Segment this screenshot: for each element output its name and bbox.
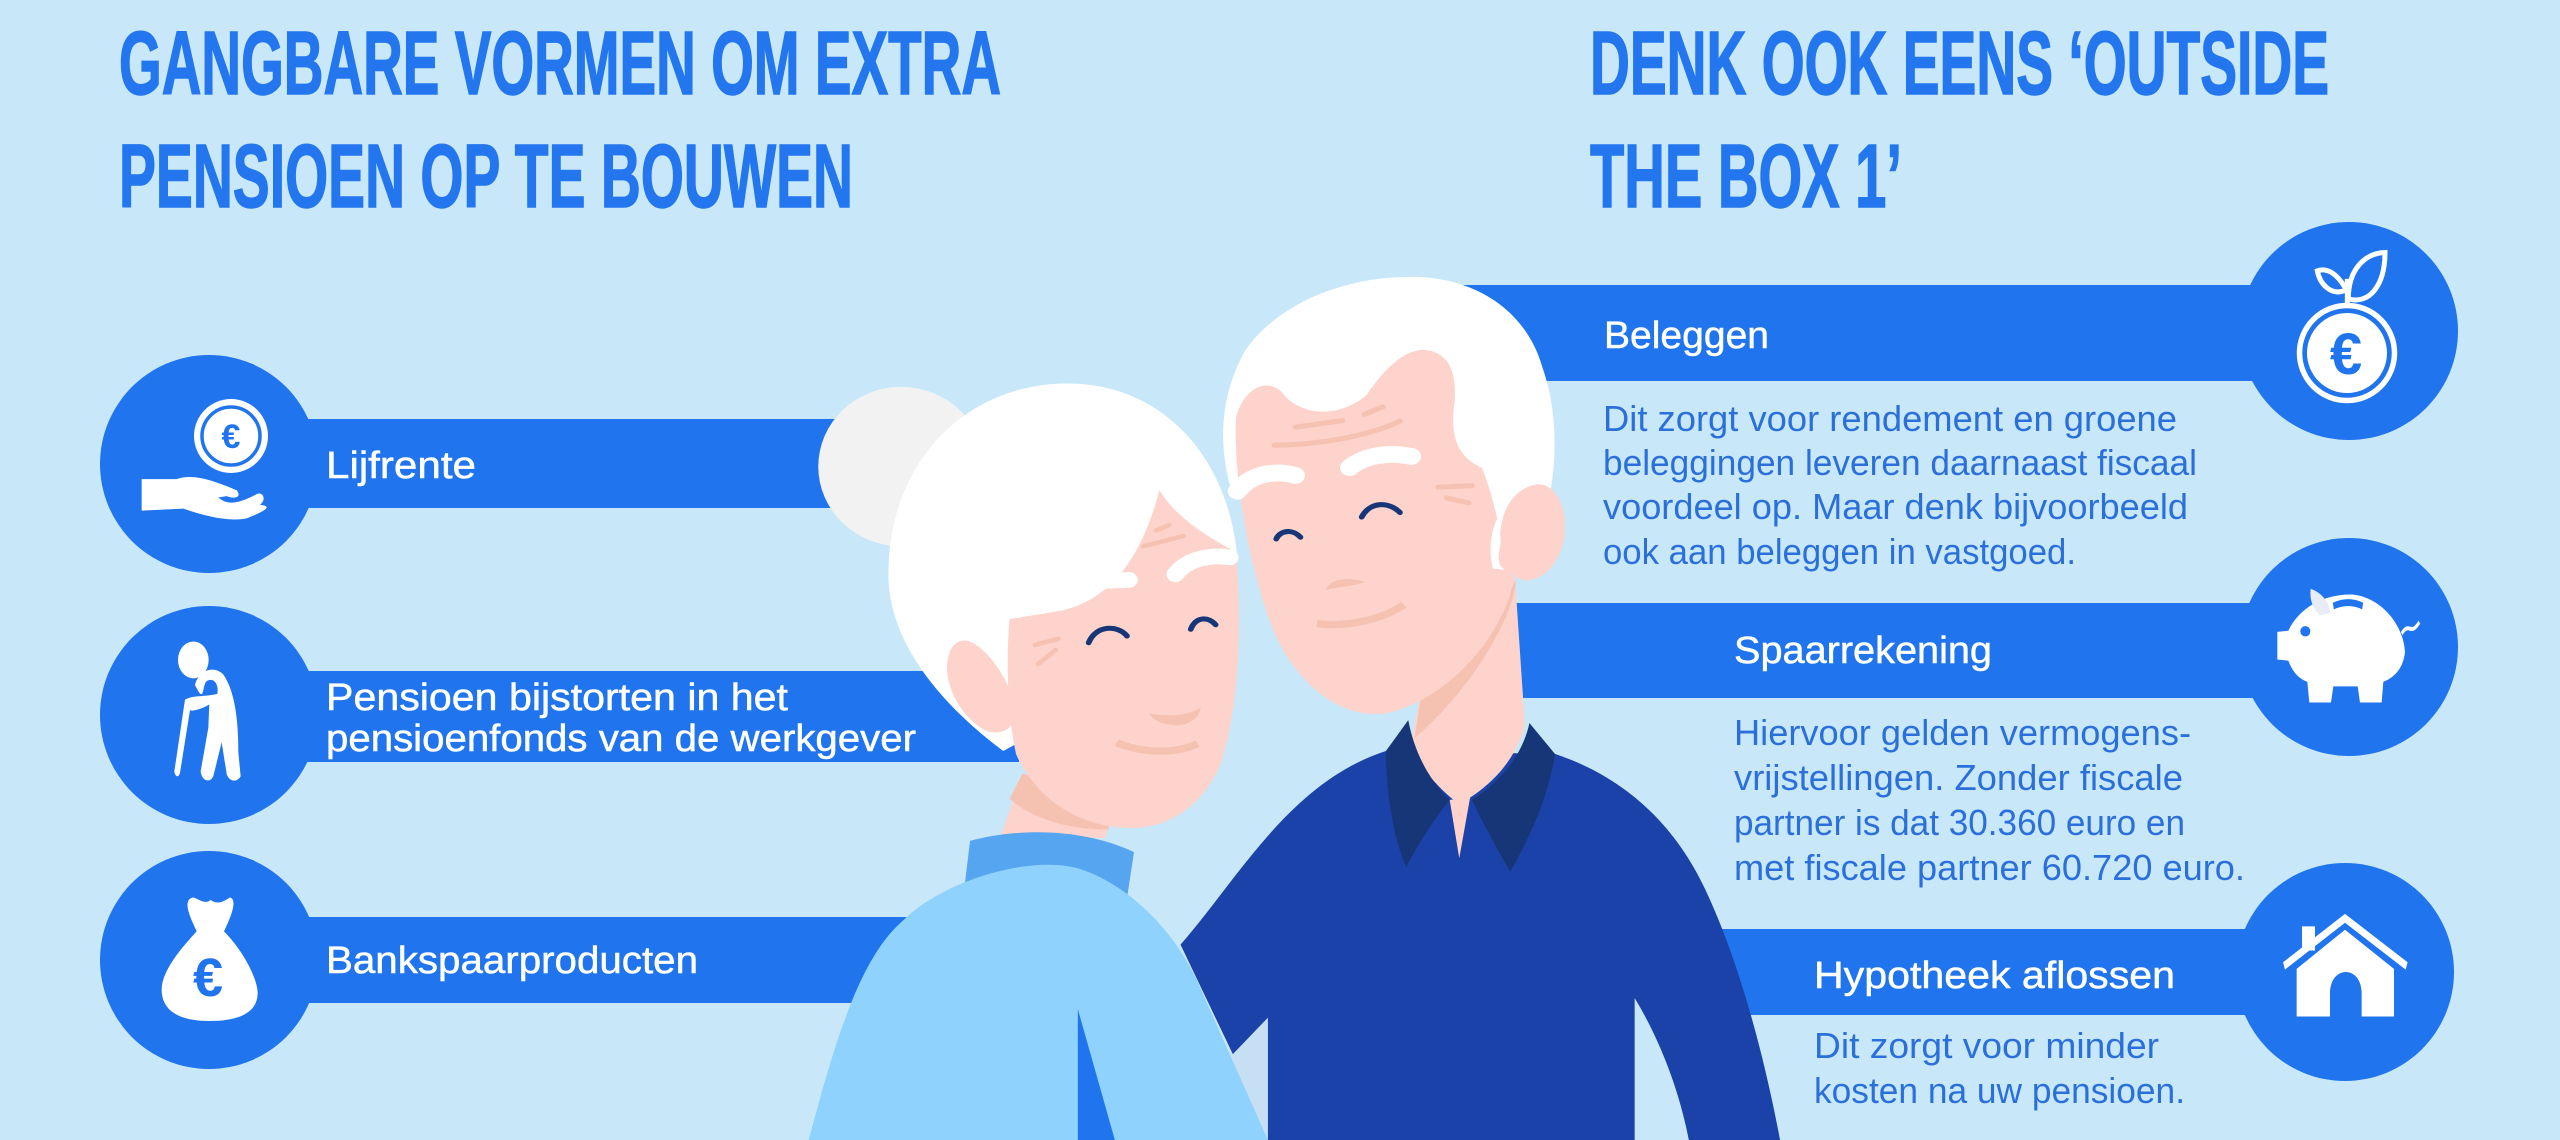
woman eyebrows: [1099, 556, 1230, 581]
label: pensioenfonds van de werkgever: [326, 718, 916, 760]
text block: kosten na uw pensioen.: [1814, 1070, 2185, 1111]
woman ear: [947, 640, 1015, 732]
man eyebrows: [1237, 454, 1411, 491]
woman wrinkles: [1035, 525, 1183, 664]
heading: left: PENSIOEN OP TE BOUWEN: [119, 127, 853, 227]
panel: left item Lijfrente: [100, 355, 849, 573]
heading: right: THE BOX 1’: [1590, 127, 1902, 227]
text block: [1603, 398, 2197, 572]
text block: Hiervoor gelden vermogens-: [1734, 712, 2191, 753]
icon circle: [100, 851, 318, 1069]
text block: beleggingen leveren daarnaast fiscaal: [1603, 442, 2197, 483]
icon circle: [100, 606, 318, 824]
panel: left item Pensioen bijstorten: [100, 606, 1019, 824]
label: Bankspaarproducten: [326, 940, 698, 982]
heading: right: [1590, 14, 2329, 227]
label: Pensioen bijstorten in het: [326, 677, 788, 719]
man nose and mouth: [1325, 579, 1366, 590]
bar: [209, 917, 929, 1003]
label: Beleggen: [1604, 315, 1769, 357]
panel: right item Spaarrekening: [1480, 538, 2458, 888]
man figure: [1181, 277, 1780, 1140]
woman nose and mouth: [1149, 708, 1201, 725]
heading: left: [119, 14, 1001, 227]
man face: [1236, 350, 1513, 714]
icon: money bag: €: [193, 948, 223, 1008]
woman neck: [1000, 773, 1115, 838]
icon circle: [2236, 863, 2454, 1081]
gap behind arm: [1226, 1012, 1268, 1140]
woman hair bun: [818, 387, 984, 546]
man shirt: [1181, 751, 1780, 1140]
woman hair: [888, 383, 1237, 751]
icon circle: [2240, 222, 2458, 440]
icon: coin with leaves: [2300, 252, 2394, 400]
text block: Dit zorgt voor minder: [1814, 1025, 2159, 1066]
text block: [1734, 712, 2245, 888]
bar: [1480, 603, 2350, 698]
heading: left: GANGBARE VORMEN OM EXTRA: [119, 14, 1001, 114]
woman collar: [965, 832, 1134, 894]
bar: [209, 671, 1019, 762]
icon: money bag: [162, 897, 258, 1021]
icon: coin above hand: [142, 399, 268, 519]
man hair: [1223, 277, 1555, 574]
icon circle: [2240, 538, 2458, 756]
text block: vrijstellingen. Zonder fiscale: [1734, 757, 2183, 798]
icon: elderly person with cane: [174, 641, 241, 781]
panel: left item Bankspaarproducten: [100, 851, 929, 1069]
text block: partner is dat 30.360 euro en: [1734, 802, 2185, 843]
woman figure: [809, 383, 1268, 1140]
bar: [209, 419, 849, 508]
man eyes: [1276, 505, 1400, 539]
label: [326, 677, 916, 760]
illustration: elderly couple: [809, 277, 1780, 1140]
panel: right item Beleggen: [1450, 222, 2458, 572]
man wrinkles: [1274, 407, 1472, 503]
text block: [1814, 1025, 2185, 1111]
text block: met fiscale partner 60.720 euro.: [1734, 847, 2245, 888]
text block: ook aan beleggen in vastgoed.: [1603, 531, 2076, 572]
icon: piggy bank: [2277, 589, 2419, 702]
woman eyes: [1089, 619, 1216, 643]
text block: voordeel op. Maar denk bijvoorbeeld: [1603, 486, 2188, 527]
label: Lijfrente: [326, 445, 476, 487]
man side hair: [1482, 467, 1505, 570]
icon: house: [2284, 918, 2407, 1016]
text block: Dit zorgt voor rendement en groene: [1603, 398, 2177, 439]
woman sweater: [809, 865, 1268, 1140]
woman face: [1008, 490, 1239, 828]
man collar: [1386, 720, 1450, 867]
icon circle: [100, 355, 318, 573]
icon: coin with leaves: €: [2330, 322, 2362, 387]
man ear: [1500, 484, 1565, 580]
label: Spaarrekening: [1734, 630, 1992, 672]
icon: coin above hand: €: [222, 418, 241, 456]
man neck: [1411, 574, 1525, 804]
bar: [1450, 285, 2350, 381]
bar: [1680, 929, 2350, 1015]
panel: right item Hypotheek aflossen: [1680, 863, 2454, 1111]
label: Hypotheek aflossen: [1814, 955, 2175, 997]
